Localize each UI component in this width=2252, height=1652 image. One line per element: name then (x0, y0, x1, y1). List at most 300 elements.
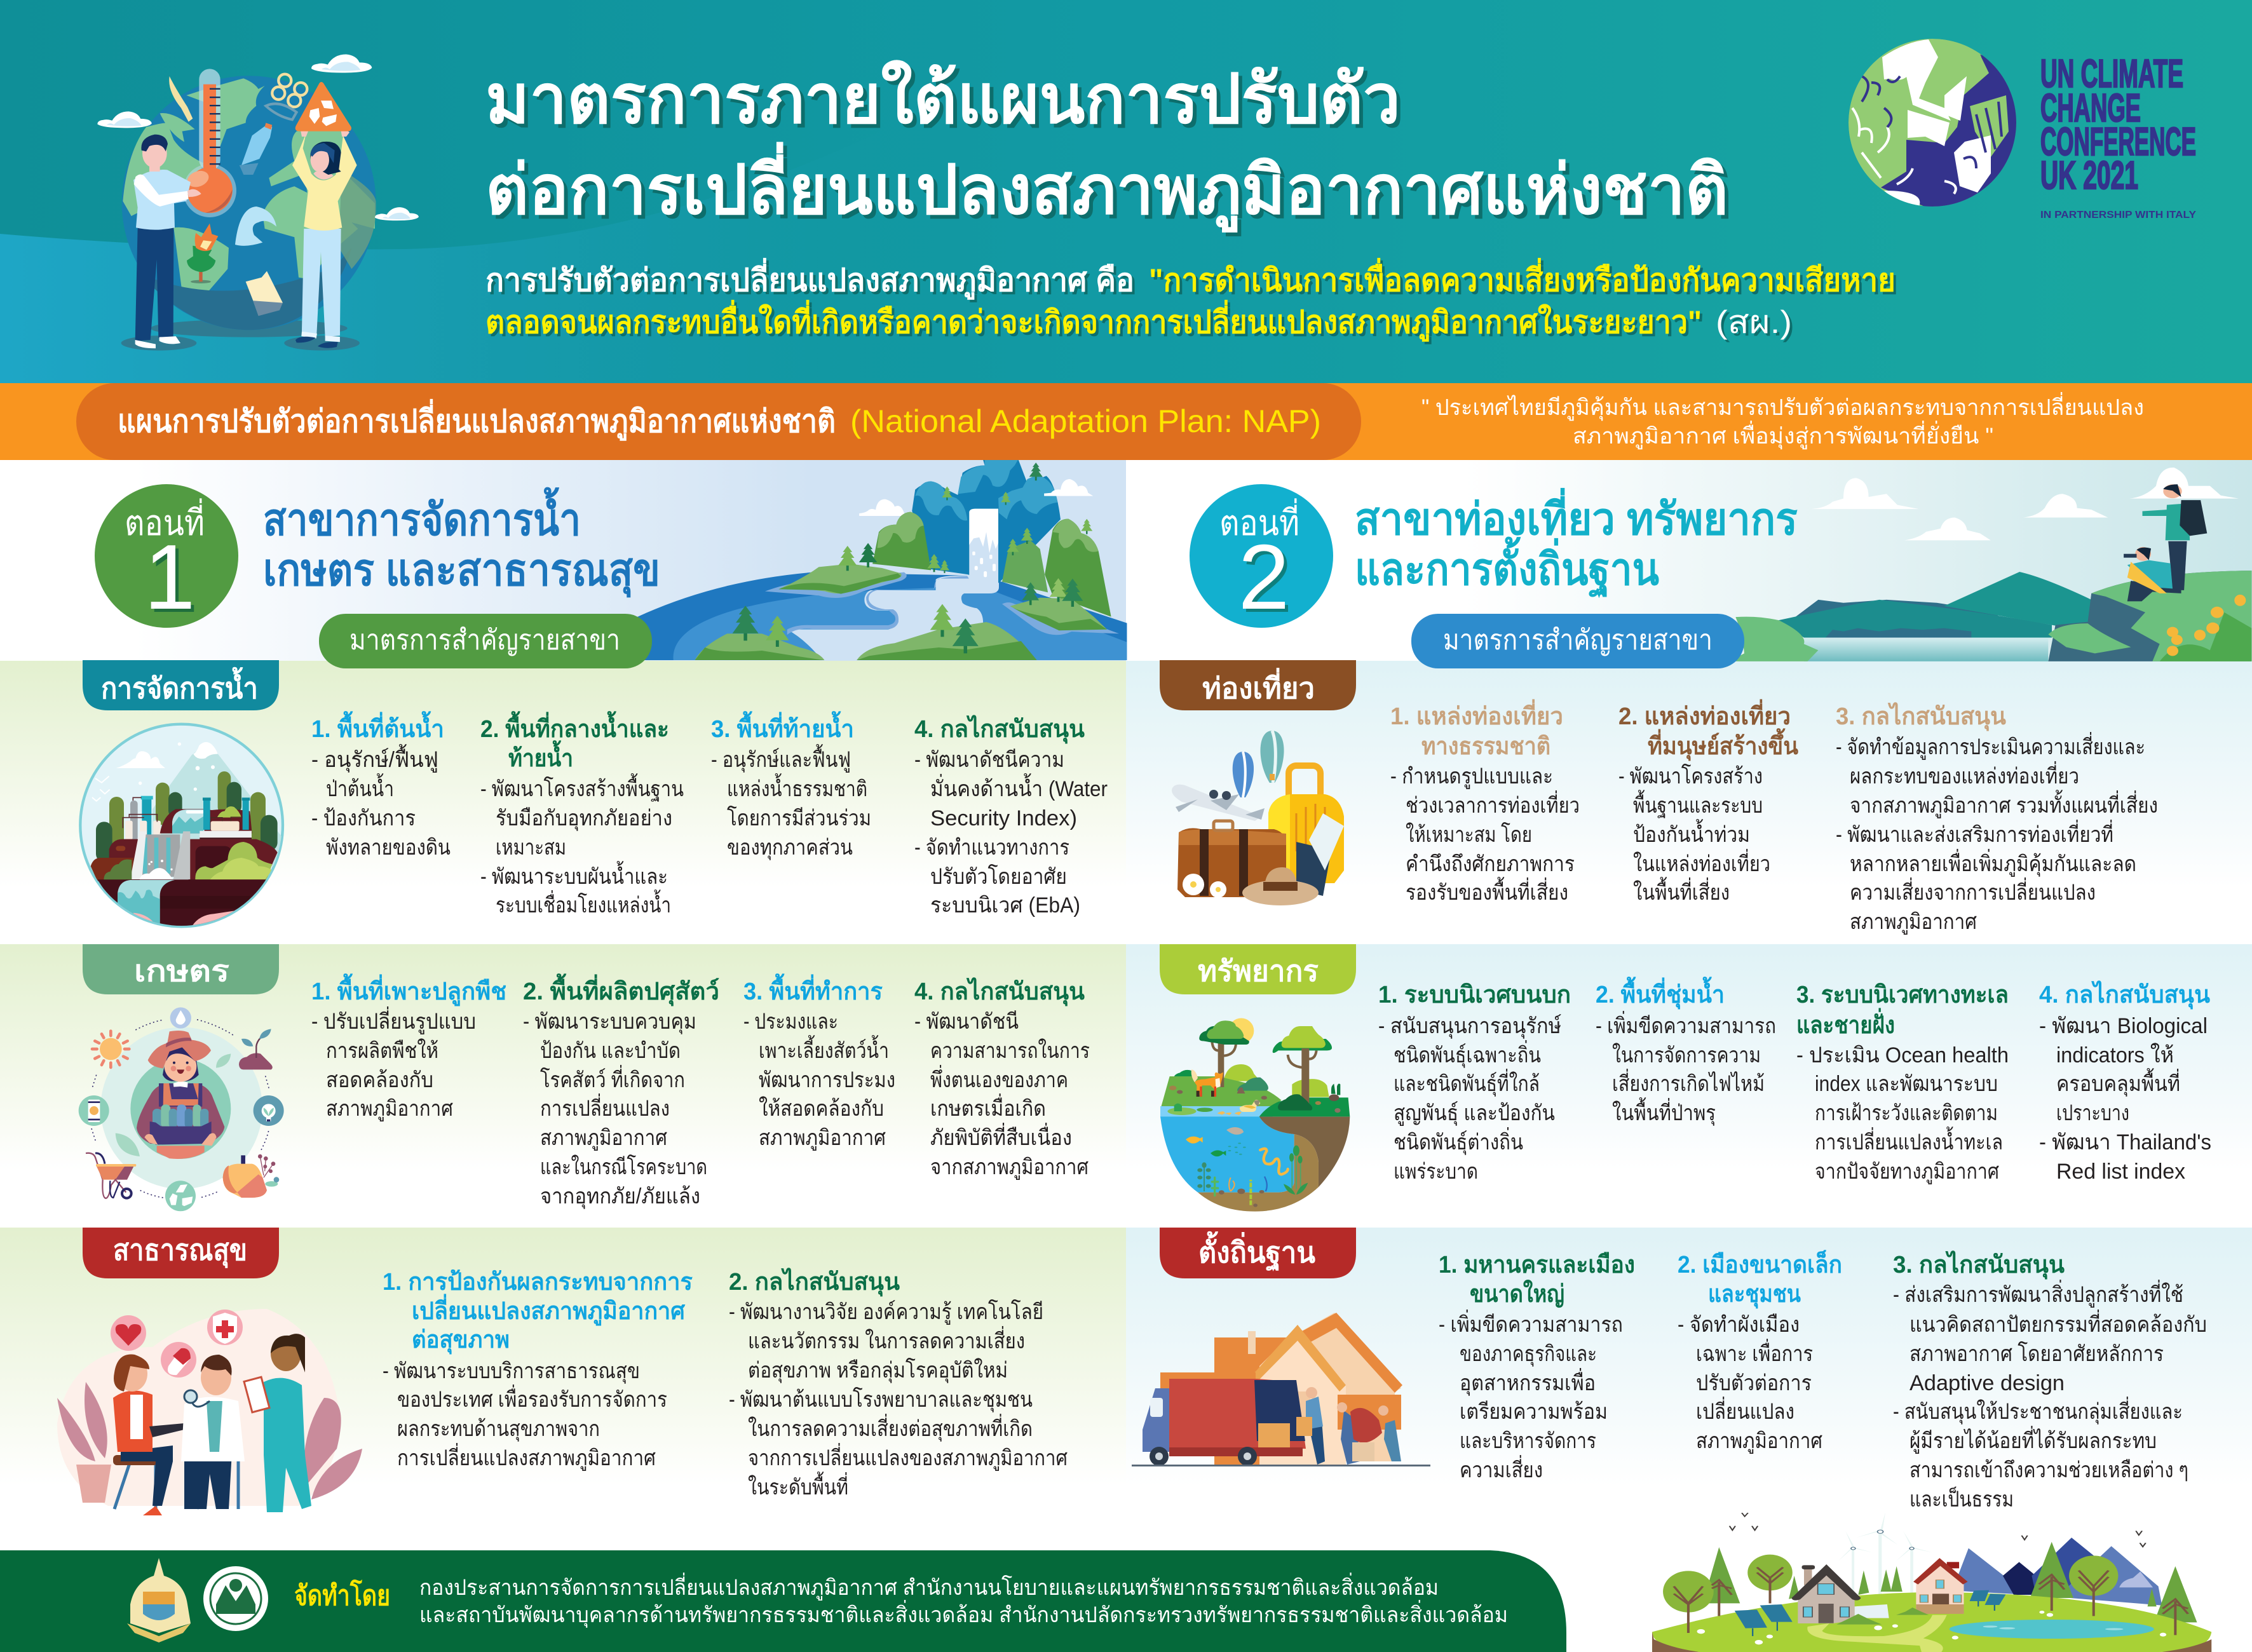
icon: berries (258, 1154, 279, 1187)
icon: recycling sign (296, 83, 351, 131)
organisation line 2: และสถาบันพัฒนาบุคลากรด้านทรัพยากรธรรมชาติและสิ่งแวดล้อม สำนักงานปลัดกระทรวงทรัพยากรธรรมชาติและสิ่งแวดล้อม (419, 1600, 1508, 1628)
column 1: large cities: - เพิ่มขีดความสามารถ (1439, 1310, 1623, 1337)
organisation line 1: กองประสานการจัดการการเปลี่ยนแปลงสภาพภูมิอากาศ สำนักงานนโยบายและแผนทรัพยากรธรรมชาติและสิ่งแวดล้อม (419, 1573, 1439, 1601)
icon: dome tank (172, 809, 205, 834)
column 3: marine and coastal: index และพัฒนาระบบ (1815, 1072, 1998, 1096)
tab: water management (83, 660, 279, 710)
column 2: livestock (523, 973, 719, 1209)
column 2: wetlands: เสี่ยงการเกิดไฟไหม้ (1612, 1069, 1765, 1096)
icon: towers and tanks (123, 796, 161, 841)
column 1: terrestrial ecosystem: สูญพันธุ์ และป้องกัน (1394, 1101, 1555, 1126)
column 1: headwaters: - อนุรักษ์/ฟื้นฟู (311, 744, 438, 773)
column 1: natural attractions: ช่วงเวลาการท่องเที่ยว (1406, 790, 1580, 818)
icon: ocean (635, 569, 1127, 660)
column 4: support mechanism (914, 715, 1108, 917)
column 3: support mechanism (1836, 702, 2158, 935)
column 2: small cities: - จัดทำผังเมือง (1678, 1313, 1800, 1337)
title: ต่อการเปลี่ยนแปลงสภาพภูมิอากาศแห่งชาติ (489, 146, 1732, 236)
section 1 key-measures pill: มาตรการสำคัญรายสาขา (349, 625, 620, 656)
icon: yellow suitcase (1268, 766, 1344, 883)
column 1: terrestrial ecosystem: ชนิดพันธุ์เฉพาะถิ่น (1394, 1040, 1541, 1068)
icon: woman (292, 130, 357, 348)
title: มาตรการภายใต้แผนการปรับตัว (485, 60, 1401, 137)
column 1: prevention: - พัฒนาระบบบริการสาธารณสุข (383, 1359, 640, 1384)
section 1 title: เกษตร และสาธารณสุข (263, 545, 660, 598)
column 3: support mechanism: และเป็นธรรม (1909, 1486, 2014, 1512)
column 3: marine and coastal: 3. ระบบนิเวศทางทะเล (1796, 982, 2009, 1008)
section 1 title: สาขาการจัดการน้ำ (263, 487, 581, 545)
section 2 key-measures pill: มาตรการสำคัญรายสาขา (1443, 625, 1713, 656)
column 4: support mechanism: พึ่งตนเองของภาค (930, 1065, 1068, 1092)
panel: agriculture measures (311, 973, 1090, 1209)
column 1: terrestrial ecosystem: และชนิดพันธุ์ที่ใกล้ (1394, 1069, 1540, 1097)
NAP pill (76, 383, 1361, 460)
icon: lily pads and frog (1167, 1104, 1213, 1115)
icon: solar panels (1735, 1590, 2005, 1636)
tab: water management: การจัดการน้ำ (101, 667, 258, 705)
column 1: terrestrial ecosystem (1378, 982, 1571, 1184)
icon: leaf (216, 1053, 231, 1068)
column 4: support mechanism: - พัฒนาดัชนี (914, 1010, 1019, 1034)
header band (0, 0, 2252, 383)
column 2: small cities (1678, 1250, 1842, 1454)
column 2: man-made attractions: ในแหล่งท่องเที่ยว (1633, 849, 1770, 876)
icon: litter in the sea (169, 74, 307, 316)
panel: water management measures (311, 711, 1108, 917)
vision line 2: สภาพภูมิอากาศ เพื่อมุ่งสู่การพัฒนาที่ยั่งยืน " (1573, 421, 1993, 449)
illustration: ecosystem cross-section (1160, 1018, 1350, 1212)
icon: mountains (1952, 1538, 2162, 1606)
column 3: support mechanism: ผู้มีรายได้น้อยที่ได้รับผลกระทบ (1909, 1426, 2157, 1454)
column 1: terrestrial ecosystem: ชนิดพันธุ์ต่างถิ่น (1394, 1127, 1523, 1155)
column 2: midstream: ระบบเชื่อมโยงแหล่งน้ำ (496, 890, 671, 917)
column 3: fisheries: พัฒนาการประมง (759, 1068, 895, 1092)
column 2: wetlands: - เพิ่มขีดความสามารถ (1596, 1011, 1776, 1038)
column 1: headwaters: พังทลายของดิน (326, 836, 451, 860)
illustration: hikers and lake landscape (1728, 468, 2251, 661)
icon: movers (1296, 1387, 1401, 1465)
icon: red cottage (1915, 1559, 1967, 1614)
column 1: crop land: 1. พื้นที่เพาะปลูกพืช (311, 973, 506, 1006)
column 4: support mechanism (2039, 980, 2211, 1184)
icon: right tree (1273, 1026, 1332, 1104)
section 1 number badge (95, 484, 238, 632)
column 2: livestock: 2. พื้นที่ผลิตปศุสัตว์ (523, 973, 719, 1006)
number 1: 1 (144, 525, 195, 628)
column 1: large cities: และบริหารจัดการ (1460, 1429, 1596, 1453)
column 4: support mechanism: ภัยพิบัติที่สืบเนื่อง (930, 1123, 1072, 1150)
icon: surface water (1160, 1106, 1273, 1117)
column 1: headwaters (311, 711, 451, 860)
icon: farmer (130, 1031, 231, 1159)
icon: cliff (2048, 571, 2251, 661)
column 3: fisheries: ให้สอดคล้องกับ (759, 1096, 884, 1121)
column 3: fisheries: - ประมงและ (743, 1010, 838, 1034)
icon: ground shadows (121, 320, 360, 351)
column 2: wetlands: ในพื้นที่ป่าพรุ (1612, 1097, 1716, 1126)
column 4: support mechanism: 4. กลไกสนับสนุน (2039, 980, 2210, 1010)
number 1: 1 (147, 529, 198, 632)
column 1: large cities: อุตสาหกรรมเพื่อ (1460, 1368, 1596, 1396)
column 1: terrestrial ecosystem: 1. ระบบนิเวศบนบก (1378, 982, 1571, 1008)
icon: green mountains (872, 512, 1111, 617)
icon: right bush and rocks (1278, 1084, 1341, 1113)
COP26 earth logo (1848, 39, 2021, 210)
column 2: man-made attractions: ที่มนุษย์สร้างขึ้น (1648, 728, 1798, 761)
column 3: support mechanism: ความเสี่ยงจากการเปลี่ยนแปลง (1850, 877, 2096, 905)
column 4: support mechanism: Security Index) (930, 806, 1077, 830)
tab: settlements (1160, 1228, 1356, 1278)
column 3: support mechanism: แนวคิดสถาปัตยกรรมที่สอดคล้องกับ (1909, 1310, 2207, 1337)
column 3: marine and coastal: จากปัจจัยทางภูมิอากาศ (1815, 1160, 1999, 1184)
icon: clouds (97, 54, 419, 220)
column 3: downstream: ของทุกภาคส่วน (727, 836, 853, 860)
icon: mountain and cloud (92, 742, 282, 866)
column 1: crop land: สอดคล้องกับ (326, 1068, 433, 1092)
column 2: livestock: โรคสัตว์ ที่เกิดจาก (540, 1065, 685, 1092)
column 1: natural attractions: 1. แหล่งท่องเที่ยว (1390, 699, 1563, 730)
column 2: small cities: และชุมชน (1708, 1281, 1801, 1309)
column 1: large cities: ความเสี่ยง (1460, 1455, 1543, 1482)
NAP title: แผนการปรับตัวต่อการเปลี่ยนแปลงสภาพภูมิอากาศแห่งชาติ (118, 399, 836, 441)
column 3: support mechanism: - ส่งเสริมการพัฒนาสิ่งปลูกสร้างที่ใช้ (1893, 1280, 2183, 1308)
subtitle: definition of adaptation (485, 258, 1898, 344)
icon: path (1807, 1615, 1947, 1652)
icon: left tree (1199, 1020, 1249, 1087)
label: part: ตอนที่ (1219, 498, 1299, 543)
column 2: midstream: ท้ายน้ำ (508, 740, 573, 772)
column 3: marine and coastal: - ประเมิน Ocean health (1796, 1043, 2009, 1067)
icon: wind turbines (1838, 1512, 1932, 1603)
section 2 header background (1126, 460, 2252, 661)
icon: water plants (1197, 1146, 1308, 1207)
icon: pale blob (57, 1309, 340, 1506)
COP26 wordmark: IN PARTNERSHIP WITH ITALY (2040, 210, 2196, 220)
column 3: downstream (711, 711, 871, 860)
label: prepared by: จัดทำโดย (294, 1578, 390, 1611)
panel: settlement measures (1439, 1250, 2207, 1512)
icon: stone cottage (1793, 1565, 1889, 1623)
column 3: fisheries: 3. พื้นที่ทำการ (743, 973, 883, 1005)
column 2: support mechanism: - พัฒนางานวิจัย องค์ความรู้ เทคโนโลยี (729, 1299, 1043, 1325)
column 2: support mechanism: 2. กลไกสนับสนุน (729, 1268, 900, 1297)
column 1: large cities: เตรียมความพร้อม (1460, 1400, 1608, 1424)
column 3: support mechanism: - สนับสนุนให้ประชาชนกลุ่มเสี่ยงและ (1893, 1397, 2183, 1425)
column 2: support mechanism: ต่อสุขภาพ หรือกลุ่มโรคอุบัติใหม่ (748, 1358, 1008, 1383)
column 4: support mechanism: ครอบคลุมพื้นที่ (2056, 1068, 2180, 1097)
column 2: support mechanism (729, 1268, 1068, 1500)
column 1: large cities: ของภาคธุรกิจและ (1460, 1342, 1597, 1367)
column 2: support mechanism: - พัฒนาต้นแบบโรงพยาบาลและชุมชน (729, 1387, 1033, 1412)
tab: settlements: ตั้งถิ่นฐาน (1198, 1231, 1316, 1271)
tab: natural resources (1160, 944, 1356, 994)
tab: tourism: ท่องเที่ยว (1202, 668, 1315, 705)
icon: bushes (1836, 1608, 1929, 1625)
icon: lake (1950, 1620, 2154, 1639)
column 3: downstream: โดยการมีส่วนร่วม (727, 806, 871, 830)
column 3: support mechanism: จากสภาพภูมิอากาศ รวมทั้งแผนที่เสี่ยง (1850, 790, 2158, 818)
NAP english name: (National Adaptation Plan: NAP) (850, 403, 1321, 439)
column 2: support mechanism: และนวัตกรรม ในการลดความเสี่ยง (748, 1326, 1025, 1353)
section 2 key-measures pill (1411, 614, 1744, 668)
icon: pale ring (100, 1027, 262, 1189)
tab: agriculture (83, 944, 279, 994)
icon: globe (122, 76, 376, 330)
icon: round trees (1663, 1555, 2188, 1635)
column 2: man-made attractions: พื้นฐานและระบบ (1633, 790, 1763, 818)
column 2: livestock: สภาพภูมิอากาศ (540, 1126, 667, 1151)
number 2: 2 (1242, 529, 1292, 632)
header illustration: people holding thermometer and recycling sign before the globe (97, 54, 419, 351)
icon: houses (1160, 1313, 1402, 1465)
column 1: terrestrial ecosystem: แพร่ระบาด (1394, 1160, 1478, 1184)
icon: island ground (1652, 1592, 2211, 1652)
column 2: man-made attractions: ในพื้นที่เสี่ยง (1633, 877, 1730, 905)
icon: left grass (1161, 1076, 1282, 1107)
column 2: support mechanism: ในการลดความเสี่ยงต่อสุขภาพที่เกิด (748, 1414, 1033, 1442)
icon: balloons (1233, 731, 1284, 797)
icon: recycle badge (165, 1181, 196, 1211)
icon: burning tree (187, 224, 218, 283)
icon: birds (1730, 1513, 2146, 1547)
column 3: downstream: 3. พื้นที่ท้ายน้ำ (711, 711, 854, 743)
section 2 title (1355, 487, 1798, 598)
section 2 number badge (1190, 484, 1333, 632)
COP26 wordmark: UK 2021 (2040, 154, 2138, 198)
icon: nurse (244, 1334, 311, 1512)
column 4: support mechanism: 4. กลไกสนับสนุน (914, 977, 1085, 1006)
column 2: small cities: ปรับตัวต่อการ (1696, 1371, 1812, 1395)
column 2: man-made attractions: - พัฒนาโครงสร้าง (1618, 764, 1763, 789)
section 1 key-measures pill (319, 614, 652, 668)
icon: ducks (1218, 1100, 1260, 1115)
icon: dam (130, 831, 190, 879)
icon: doctor (181, 1355, 245, 1509)
column 1: prevention: ของประเทศ เพื่อรองรับการจัดการ (397, 1385, 667, 1412)
title (485, 60, 1732, 236)
illustration: waterfall landscape (635, 460, 1127, 660)
icon: back trees (109, 771, 266, 848)
column 4: support mechanism: มั่นคงด้านน้ำ (Water (930, 773, 1108, 801)
column 1: crop land: การผลิตพืชให้ (326, 1038, 438, 1063)
column 1: headwaters: - ป้องกันการ (311, 806, 416, 830)
icon: man (133, 135, 201, 348)
column 3: fisheries: เพาะเลี้ยงสัตว์น้ำ (759, 1035, 889, 1063)
column 3: downstream: แหล่งน้ำธรรมชาติ (727, 773, 867, 801)
icon: ministry crest (127, 1558, 191, 1642)
icon: standing hiker (2142, 484, 2207, 590)
column 3: support mechanism: Adaptive design (1909, 1371, 2065, 1395)
icon: stool and patient (113, 1355, 184, 1515)
icon: lake (1804, 638, 2048, 661)
column 2: midstream: 2. พื้นที่กลางน้ำและ (480, 711, 669, 743)
title: มาตรการภายใต้แผนการปรับตัว (489, 64, 1404, 141)
COP26 wordmark: CHANGE (2040, 86, 2141, 130)
icon: lake (1160, 1116, 1294, 1193)
column 1: crop land (311, 973, 506, 1121)
subtitle: definition of adaptation: "การดำเนินการเพื่อลดความเสี่ยงหรือป้องกันความเสียหาย (1149, 258, 1896, 298)
subtitle: definition of adaptation: "การดำเนินการเพื่อลดความเสี่ยงหรือป้องกันความเสียหาย (1151, 261, 1898, 301)
subtitle: definition of adaptation: การปรับตัวต่อการเปลี่ยนแปลงสภาพภูมิอากาศ คือ (485, 258, 1134, 300)
number 2: 2 (1238, 525, 1289, 628)
icon: bushes (104, 842, 272, 880)
subtitle: definition of adaptation: (สผ.) (1716, 304, 1792, 340)
icon: water drop (170, 1007, 191, 1029)
row backgrounds (0, 661, 2252, 1550)
icon: institute seal (203, 1566, 268, 1631)
tab: tourism (1160, 660, 1356, 710)
column 1: prevention: เปลี่ยนแปลงสภาพภูมิอากาศ (412, 1294, 686, 1326)
subtitle: definition of adaptation: ตลอดจนผลกระทบอื่นใดที่เกิดหรือคาดว่าจะเกิดจากการเปลี่ยนแปลงสภาพภูมิอากาศในระยะยาว" (485, 300, 1702, 342)
footer bar (0, 1550, 1566, 1652)
subtitle: definition of adaptation: (สผ.) (1718, 307, 1794, 342)
column 4: support mechanism: เปราะบาง (2056, 1101, 2129, 1125)
icon: left hill and bushes (1172, 1064, 1260, 1082)
column 3: support mechanism (1893, 1250, 2207, 1512)
column 1: prevention: การเปลี่ยนแปลงสภาพภูมิอากาศ (397, 1443, 656, 1471)
tab: public health: สาธารณสุข (113, 1233, 247, 1268)
column 2: wetlands: ในการจัดการความ (1612, 1043, 1761, 1067)
column 4: support mechanism: จากสภาพภูมิอากาศ (930, 1155, 1089, 1180)
column 2: midstream: เหมาะสม (496, 836, 566, 860)
icon: left bush and rocks (1169, 1078, 1268, 1100)
illustration: dam in a round landscape (80, 724, 283, 928)
icon: sun (92, 1031, 129, 1067)
illustration: luggage and travel (1172, 731, 1344, 905)
icon: dotted orbit (92, 1020, 269, 1198)
icon: brown suitcase (1177, 821, 1286, 897)
icon: hat (1242, 867, 1319, 905)
icon: frangipani flowers (1183, 874, 1226, 898)
panel: public health measures (383, 1268, 1068, 1500)
column 3: support mechanism: สภาพภูมิอากาศ (1850, 910, 1977, 935)
column 2: livestock: - พัฒนาระบบควบคุม (523, 1010, 696, 1034)
column 1: natural attractions: รองรับของพื้นที่เสี่ยง (1406, 877, 1568, 905)
column 3: marine and coastal: การเฝ้าระวังและติดตาม (1815, 1101, 1998, 1125)
icon: fish (1186, 1127, 1246, 1156)
column 4: support mechanism (914, 977, 1090, 1180)
icon: medicine badge (79, 1095, 109, 1126)
column 2: support mechanism: จากการเปลี่ยนแปลงของสภาพภูมิอากาศ (748, 1443, 1068, 1471)
icon: cloud (859, 479, 1093, 516)
column 4: support mechanism: 4. กลไกสนับสนุน (914, 715, 1085, 744)
icon: background trees (1703, 1542, 2197, 1622)
vision line 1: " ประเทศไทยมีภูมิคุ้มกัน และสามารถปรับตัวต่อผลกระทบจากการเปลี่ยนแปลง (1421, 392, 2144, 421)
column 1: headwaters: ป่าต้นน้ำ (326, 773, 394, 801)
column 2: man-made attractions: 2. แหล่งท่องเที่ยว (1618, 699, 1791, 730)
orange NAP band (0, 383, 2252, 460)
icon: pine trees (733, 463, 1092, 653)
icon: sun (1228, 1018, 1254, 1043)
label: part: ตอนที่ (125, 498, 205, 543)
column 4: support mechanism: - พัฒนาดัชนีความ (914, 748, 1064, 772)
icon: shield badge (207, 1310, 243, 1345)
column 1: natural attractions: - กำหนดรูปแบบและ (1390, 764, 1553, 789)
column 3: support mechanism: - พัฒนาและส่งเสริมการท่องเที่ยวที่ (1836, 820, 2113, 847)
illustration: sustainable village (1652, 1512, 2211, 1652)
icon: treatment building (200, 797, 252, 839)
icon: red earth (91, 809, 278, 881)
icon: thermometer (183, 69, 236, 217)
column 1: natural attractions (1390, 699, 1580, 905)
column 3: marine and coastal: และชายฝั่ง (1796, 1008, 1895, 1039)
tab: agriculture: เกษตร (134, 954, 229, 987)
column 1: crop land: - ปรับเปลี่ยนรูปแบบ (311, 1006, 476, 1034)
column 3: fisheries: สภาพภูมิอากาศ (759, 1126, 886, 1151)
icon: heart badge (111, 1315, 146, 1351)
icon: mountains (1779, 572, 2091, 638)
COP26 wordmark (2040, 52, 2196, 220)
icon: cliff soil (1198, 1116, 1350, 1212)
column 4: support mechanism: Red list index (2056, 1160, 2185, 1184)
column 3: support mechanism: ผลกระทบของแหล่งท่องเที่ยว (1850, 761, 2079, 789)
icon: flowers (1697, 1611, 2166, 1644)
icon: sitting hiker (2124, 547, 2181, 601)
column 3: support mechanism: สามารถเข้าถึงความช่วยเหลือต่าง ๆ (1909, 1458, 2188, 1482)
column 2: midstream: รับมือกับอุทกภัยอย่าง (496, 806, 672, 831)
tab: natural resources: ทรัพยากร (1198, 954, 1319, 987)
column 2: small cities: เปลี่ยนแปลง (1696, 1397, 1794, 1424)
column 2: small cities: 2. เมืองขนาดเล็ก (1678, 1250, 1842, 1278)
column 2: support mechanism: ในระดับพื้นที่ (748, 1472, 848, 1500)
section 1 title (263, 487, 660, 598)
icon: blue mountains (912, 460, 1061, 583)
column 1: prevention (383, 1269, 693, 1471)
column 1: crop land: สภาพภูมิอากาศ (326, 1097, 453, 1121)
column 1: prevention: ผลกระทบด้านสุขภาพจาก (397, 1417, 600, 1442)
icon: flowers (2160, 595, 2251, 661)
column 4: support mechanism: - พัฒนา Thailand's (2039, 1130, 2211, 1154)
icon: pill badge (161, 1342, 196, 1378)
column 2: midstream (480, 711, 684, 917)
section 2 title: และการตั้งถิ่นฐาน (1355, 536, 1659, 598)
column 2: midstream: - พัฒนาระบบผันน้ำและ (480, 861, 668, 889)
icon: passport (1296, 813, 1344, 896)
subtitle: definition of adaptation: การปรับตัวต่อการเปลี่ยนแปลงสภาพภูมิอากาศ คือ (488, 261, 1137, 302)
icon: plane (1172, 785, 1265, 821)
column 3: support mechanism: 3. กลไกสนับสนุน (1836, 702, 2006, 731)
column 3: marine and coastal (1796, 982, 2009, 1184)
column 1: large cities: 1. มหานครและเมือง (1439, 1252, 1635, 1278)
column 1: prevention: ต่อสุขภาพ (412, 1327, 510, 1355)
icon: right grass (1259, 1097, 1350, 1116)
column 2: wetlands: 2. พื้นที่ชุ่มน้ำ (1596, 977, 1725, 1010)
column 4: support mechanism: เกษตรเมื่อเกิด (930, 1093, 1046, 1121)
icon: sprout (239, 1029, 273, 1069)
icon: wheelbarrow (86, 1153, 136, 1198)
column 1: prevention: 1. การป้องกันผลกระทบจากการ (383, 1269, 693, 1296)
column 4: support mechanism: indicators ให้ (2056, 1043, 2174, 1067)
panel: tourism measures (1390, 699, 2158, 935)
illustration: health workers and patient (57, 1309, 362, 1515)
column 2: livestock: จากอุทกภัย/ภัยแล้ง (540, 1184, 700, 1209)
column 2: livestock: ป้องกัน และบำบัด (540, 1039, 681, 1063)
section 2 title: สาขาท่องเที่ยว ทรัพยากร (1355, 487, 1798, 544)
column 1: natural attractions: คำนึงถึงศักยภาพการ (1406, 852, 1575, 876)
column 2: small cities: สภาพภูมิอากาศ (1696, 1429, 1822, 1454)
column 2: man-made attractions: ป้องกันน้ำท่วม (1633, 819, 1750, 847)
column 3: support mechanism: 3. กลไกสนับสนุน (1893, 1250, 2065, 1280)
column 3: support mechanism: สภาพอากาศ โดยอาศัยหลักการ (1909, 1341, 2164, 1366)
illustration: farmer with crops (79, 1007, 284, 1211)
column 1: natural attractions: ทางธรรมชาติ (1421, 733, 1550, 760)
tab: public health (83, 1228, 279, 1278)
panel: natural resources measures (1378, 977, 2211, 1184)
column 2: small cities: เฉพาะ เพื่อการ (1696, 1339, 1813, 1366)
column 4: support mechanism: ปรับตัวโดยอาศัย (930, 864, 1067, 889)
icon: plants (57, 1382, 362, 1503)
title: ต่อการเปลี่ยนแปลงสภาพภูมิอากาศแห่งชาติ (485, 142, 1728, 233)
